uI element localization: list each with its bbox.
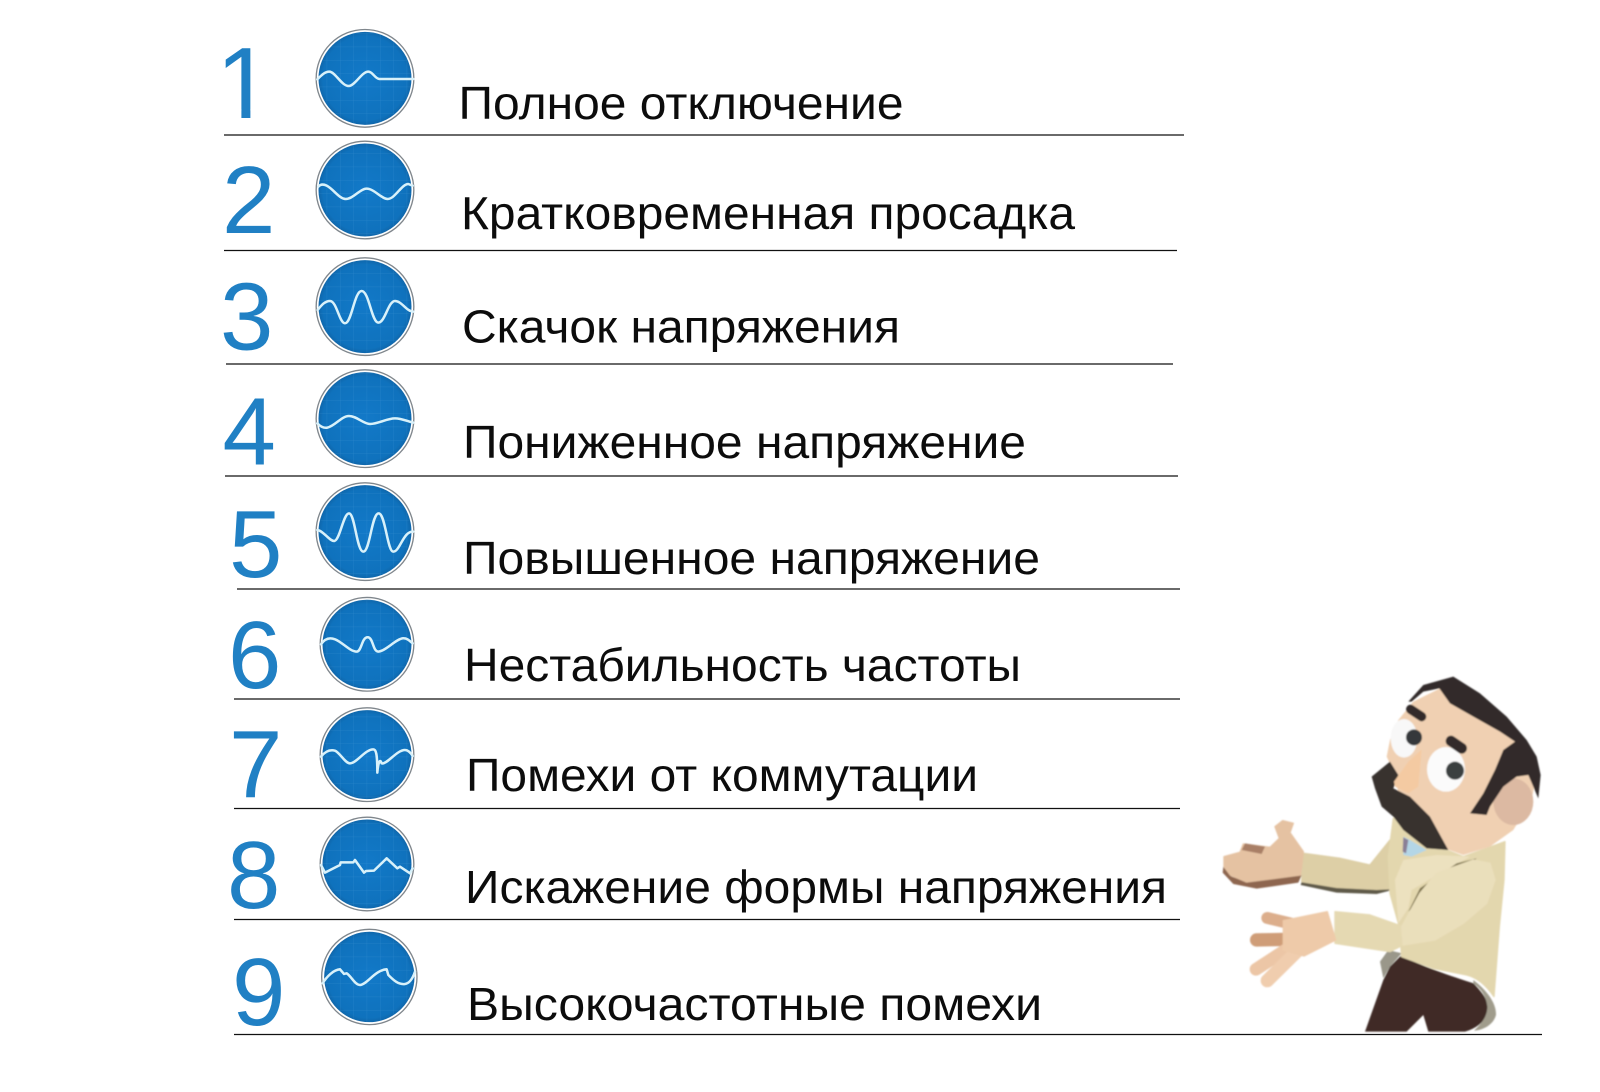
number 7: 7 — [229, 711, 282, 818]
shirt and tie — [1403, 837, 1427, 857]
head — [1387, 688, 1537, 855]
label 7: Помехи от коммутации — [466, 749, 978, 801]
lapel shadow — [1408, 858, 1477, 912]
jacket back tail — [1380, 950, 1402, 978]
left eye — [1391, 719, 1422, 758]
middle finger — [1257, 919, 1290, 960]
nose — [1394, 749, 1422, 793]
upper arm shadow — [1301, 882, 1397, 894]
jacket body — [1388, 818, 1505, 997]
ring finger — [1256, 945, 1293, 969]
row 6: frequency instability — [228, 597, 1180, 709]
label 6: Нестабильность частоты — [464, 639, 1021, 691]
label 9: Высокочастотные помехи — [467, 978, 1042, 1030]
label 3: Скачок напряжения — [462, 300, 900, 352]
pupil — [1446, 762, 1464, 780]
trousers — [1365, 955, 1489, 1032]
jacket hem edge — [1473, 980, 1496, 1031]
mustache — [1372, 762, 1448, 850]
palm underside — [1223, 867, 1302, 889]
index finger — [1267, 918, 1297, 925]
label 2: Кратковременная просадка — [461, 187, 1075, 239]
row 8: waveform distortion — [227, 817, 1180, 929]
right eye — [1427, 747, 1465, 792]
row 9: high-frequency noise — [232, 929, 1542, 1046]
row 2: short sag — [222, 141, 1177, 254]
icon: waveform distorted — [320, 817, 414, 911]
lower sleeve — [1335, 912, 1407, 952]
number 1: 1 — [216, 28, 272, 140]
back sleeve — [1302, 840, 1403, 889]
number 9: 9 — [232, 939, 285, 1046]
icon: waveform high amplitude — [316, 483, 414, 580]
number 8: 8 — [227, 822, 280, 929]
back layers: trousers and jacket — [1365, 950, 1496, 1032]
left eyebrow — [1411, 709, 1422, 717]
jacket lapel — [1395, 855, 1470, 923]
label 5: Повышенное напряжение — [463, 532, 1040, 584]
icon: waveform cut off — [316, 29, 414, 127]
finger shadow — [1242, 843, 1265, 854]
row 3: voltage spike — [220, 258, 1173, 370]
eyeball — [1391, 719, 1417, 758]
number 6: 6 — [228, 602, 281, 709]
icon: waveform sag — [316, 141, 414, 239]
hair — [1408, 677, 1541, 815]
upper hand — [1223, 821, 1303, 889]
ear — [1493, 778, 1533, 825]
icon: waveform switching transient — [320, 708, 414, 801]
icon: waveform low amplitude — [316, 370, 414, 467]
front sleeve — [1402, 860, 1495, 945]
label 8: Искажение формы напряжения — [465, 861, 1167, 913]
row 4: undervoltage — [222, 370, 1178, 486]
row 7: switching noise — [229, 708, 1180, 818]
row 5: overvoltage — [229, 483, 1180, 598]
icon: waveform spike — [316, 258, 414, 355]
icon: waveform high-frequency noise — [322, 929, 417, 1025]
little finger — [1267, 950, 1298, 981]
palm — [1283, 912, 1336, 956]
number 5: 5 — [229, 491, 282, 598]
number 4: 4 — [222, 378, 276, 486]
label 1: Полное отключение — [458, 77, 904, 129]
icon: waveform frequency bump — [320, 597, 414, 691]
row 1: full outage — [216, 28, 1184, 140]
right eyebrow — [1451, 741, 1462, 748]
number 3: 3 — [220, 264, 273, 370]
palm and thumb — [1224, 821, 1303, 882]
lower hand — [1256, 912, 1336, 981]
number 2: 2 — [222, 147, 275, 254]
eyeball — [1427, 747, 1465, 792]
character: clay man with mustache gesturing left — [1223, 677, 1541, 1032]
pupil — [1406, 729, 1422, 745]
label 4: Пониженное напряжение — [463, 416, 1026, 468]
